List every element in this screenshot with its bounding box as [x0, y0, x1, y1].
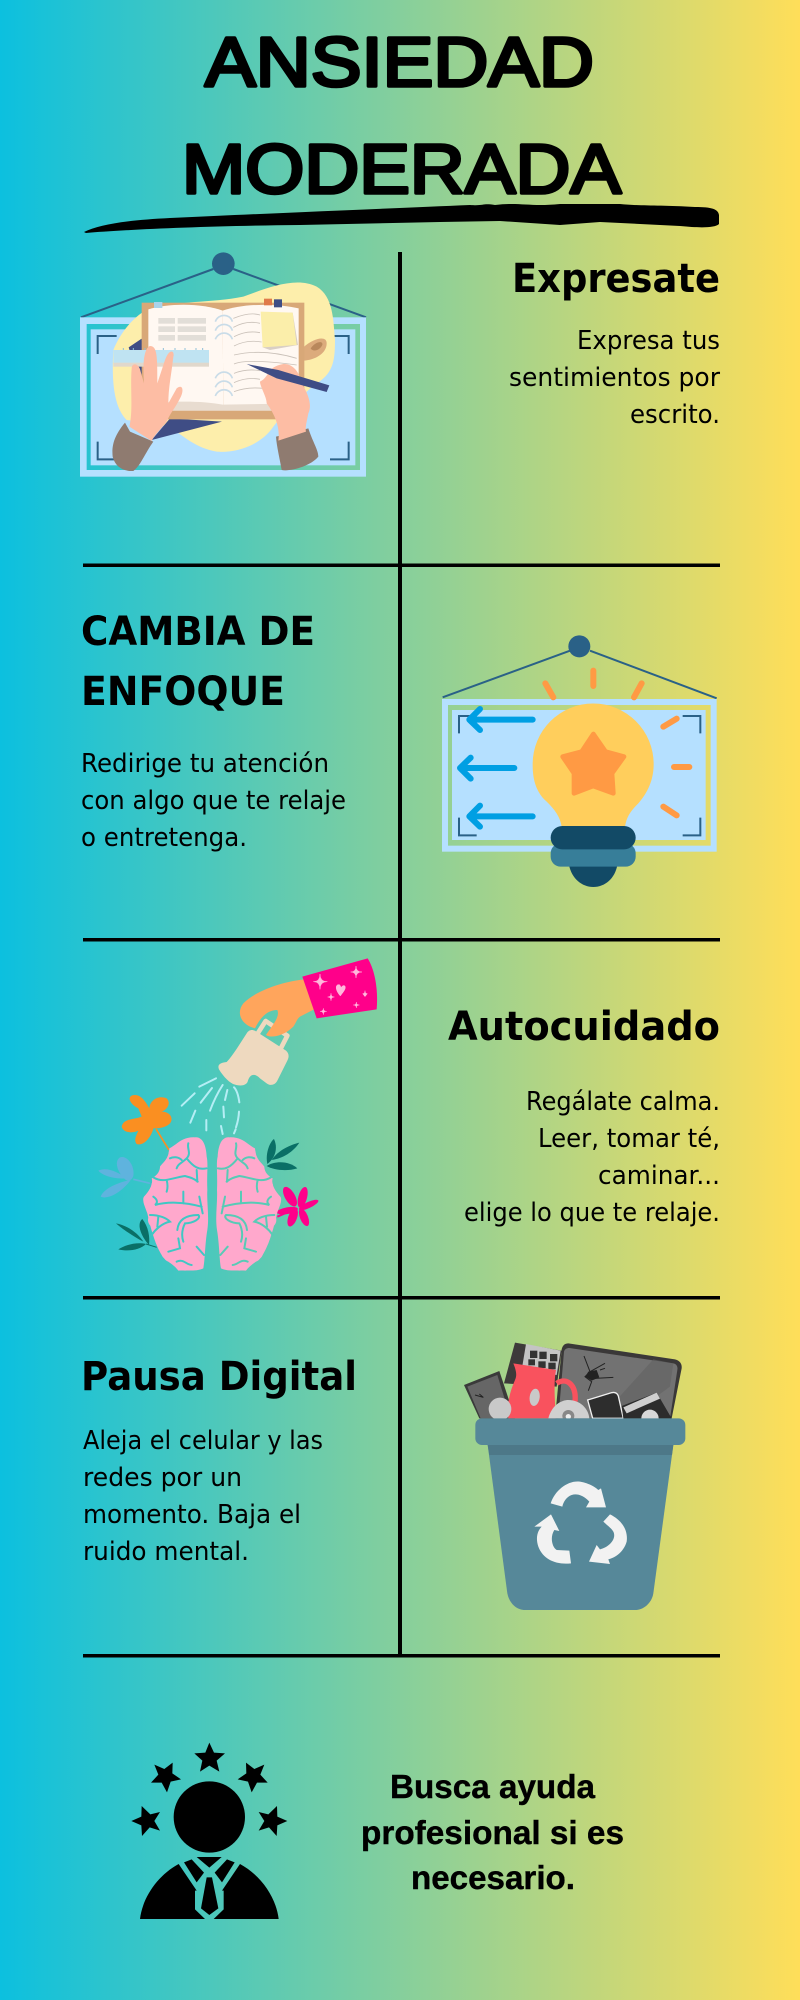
text: Pausa Digital body: ruido mental. — [83, 1537, 249, 1567]
text: Cambia de enfoque body: con algo que te relaje — [81, 786, 346, 816]
icon: lightbulb — [442, 635, 717, 887]
stars — [131, 1743, 287, 1836]
icon: recycling bin with devices — [464, 1343, 685, 1610]
heading: Cambia de enfoque: ENFOQUE — [81, 669, 285, 715]
heading: Autocuidado: Autocuidado — [448, 1004, 720, 1050]
text: Pausa Digital body: Aleja el celular y las — [83, 1426, 323, 1456]
heading: Cambia de enfoque: CAMBIA DE — [81, 609, 315, 655]
title — [182, 23, 621, 208]
pink flower — [276, 1185, 320, 1228]
body and tie — [140, 1857, 279, 1919]
keyboard — [504, 1343, 562, 1387]
heading: Cambia de enfoque — [81, 609, 315, 715]
blue leaves — [98, 1157, 150, 1197]
icon: journal and hands — [80, 252, 366, 477]
brush underline — [84, 204, 719, 233]
text: Cambia de enfoque body: o entretenga. — [81, 823, 247, 853]
text: Autocuidado body — [464, 1087, 720, 1228]
text: Expresate body: escrito. — [630, 400, 720, 430]
watering can — [218, 1021, 289, 1085]
text: Expresate body: sentimientos por — [509, 363, 720, 393]
orange flower — [122, 1095, 172, 1150]
sleeve — [302, 958, 377, 1018]
text: Pausa Digital body: redes por un — [83, 1463, 242, 1493]
icon: watering brain — [98, 958, 377, 1271]
recycling symbol — [534, 1481, 627, 1564]
text: Cambia de enfoque body — [81, 749, 346, 853]
grid lines — [83, 252, 720, 1658]
head — [174, 1781, 245, 1853]
text: Pausa Digital body: momento. Baja el — [83, 1500, 301, 1530]
callout: seek professional help: Busca ayuda — [390, 1768, 596, 1805]
heading: Expresate: Expresate — [512, 256, 720, 302]
bin body — [488, 1445, 673, 1610]
text: Autocuidado body: caminar... — [598, 1161, 720, 1191]
title: MODERADA — [182, 130, 621, 208]
text: Autocuidado body: Regálate calma. — [526, 1087, 720, 1117]
hand — [240, 979, 316, 1037]
text: Expresate body — [509, 326, 720, 430]
water drops — [182, 1078, 239, 1134]
icon: person with stars — [131, 1743, 287, 1919]
bin rim — [475, 1418, 685, 1445]
text: Expresate body: Expresa tus — [577, 326, 720, 356]
title: ANSIEDAD — [205, 23, 594, 101]
text: Pausa Digital body — [83, 1426, 323, 1567]
text: Autocuidado body: elige lo que te relaje. — [464, 1198, 720, 1228]
text: Cambia de enfoque body: Redirige tu atención — [81, 749, 329, 779]
small items — [489, 1392, 672, 1427]
phone — [464, 1371, 515, 1418]
text: Autocuidado body: Leer, tomar té, — [538, 1124, 720, 1154]
red jug — [508, 1363, 575, 1418]
brain — [143, 1137, 281, 1271]
callout: seek professional help: profesional si es — [361, 1814, 624, 1851]
dark leaves — [116, 1139, 299, 1250]
callout: seek professional help — [361, 1768, 624, 1896]
callout: seek professional help: necesario. — [411, 1859, 575, 1896]
tablet — [555, 1343, 682, 1418]
heading: Pausa Digital: Pausa Digital — [81, 1354, 357, 1400]
